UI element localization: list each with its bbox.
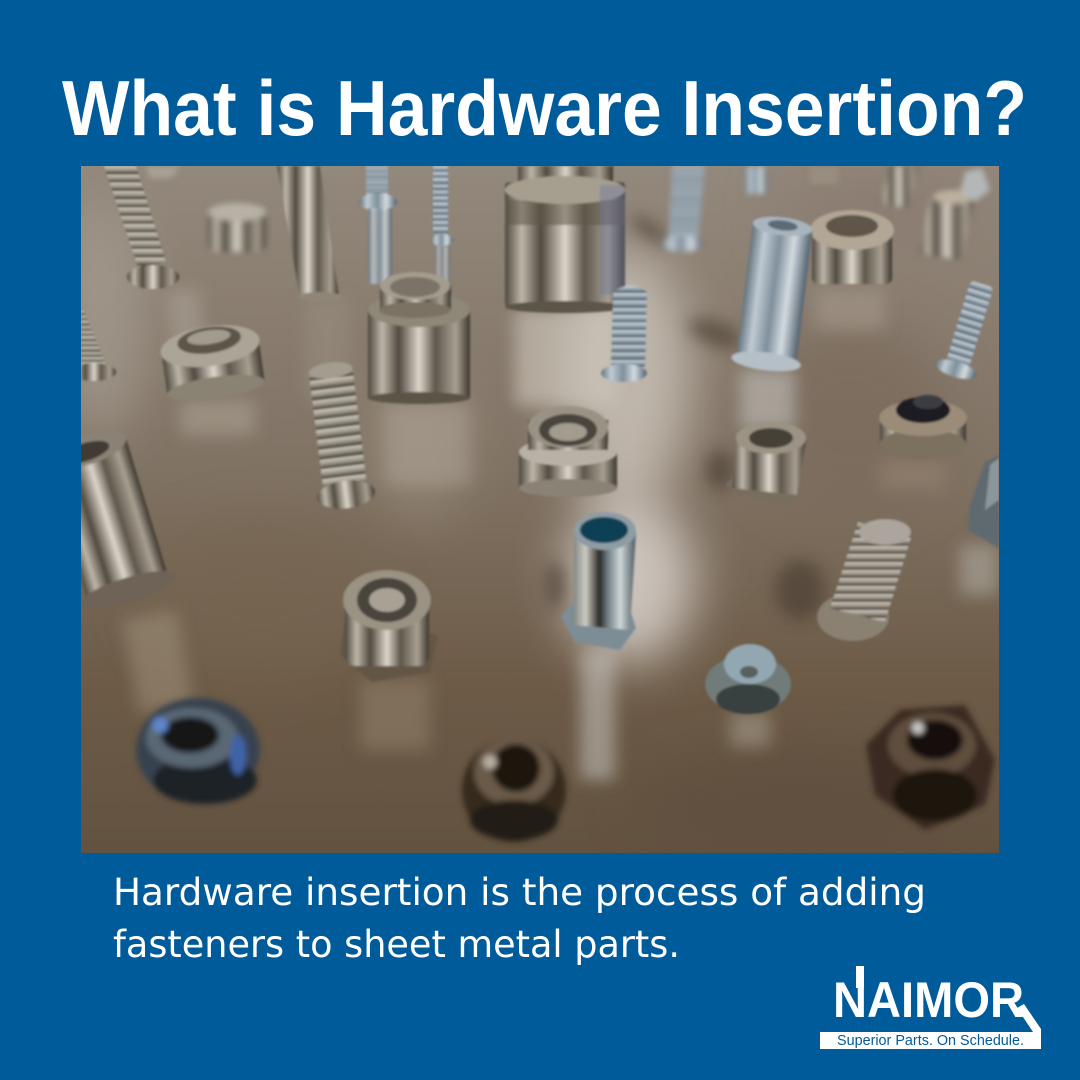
stepped standoff <box>368 272 470 404</box>
small blue nut <box>705 644 791 714</box>
long pin <box>277 166 342 302</box>
threaded stud: right <box>817 519 911 641</box>
blue screw: right <box>936 280 994 380</box>
description text: fasteners to sheet metal parts. <box>113 923 680 966</box>
blurred background fasteners <box>145 166 990 260</box>
blue cylinder standoff <box>730 213 818 375</box>
dark blue nut <box>136 698 260 804</box>
logo wordmark: NAIMOR <box>833 972 1024 1028</box>
cylinder: right edge <box>968 455 999 548</box>
flanged nut: left <box>160 324 265 398</box>
description text <box>113 871 926 966</box>
blue screw: top <box>661 166 705 252</box>
thin blue pins <box>359 166 453 284</box>
blue screw: centre <box>601 286 647 382</box>
knurled nut: upper right <box>810 210 894 284</box>
reflections <box>123 288 998 780</box>
logo: Naimor <box>820 966 1041 1049</box>
metal plate <box>55 165 999 853</box>
nut with black insert <box>878 394 968 443</box>
knurled nut: centre <box>519 406 617 497</box>
screw: left edge <box>81 308 118 382</box>
shadows <box>545 211 825 620</box>
hex nut: right centre <box>728 426 806 496</box>
logo N riser <box>856 966 864 988</box>
logo banner <box>820 1004 1041 1049</box>
large cylinder: left edge <box>81 439 174 596</box>
threaded nut: lower centre left <box>340 570 438 682</box>
large standoff: top centre <box>505 166 625 313</box>
logo tagline: Superior Parts. On Schedule. <box>837 1033 1024 1049</box>
description text: Hardware insertion is the process of adding <box>113 871 926 914</box>
silver threaded screw <box>308 362 376 510</box>
blue standoff with hex base <box>561 512 636 650</box>
dark bronze nut <box>462 738 566 842</box>
photo: assorted metal fasteners on brushed sheet metal <box>33 165 1002 853</box>
dark hex nut <box>866 705 995 830</box>
screw: top left <box>104 166 179 289</box>
